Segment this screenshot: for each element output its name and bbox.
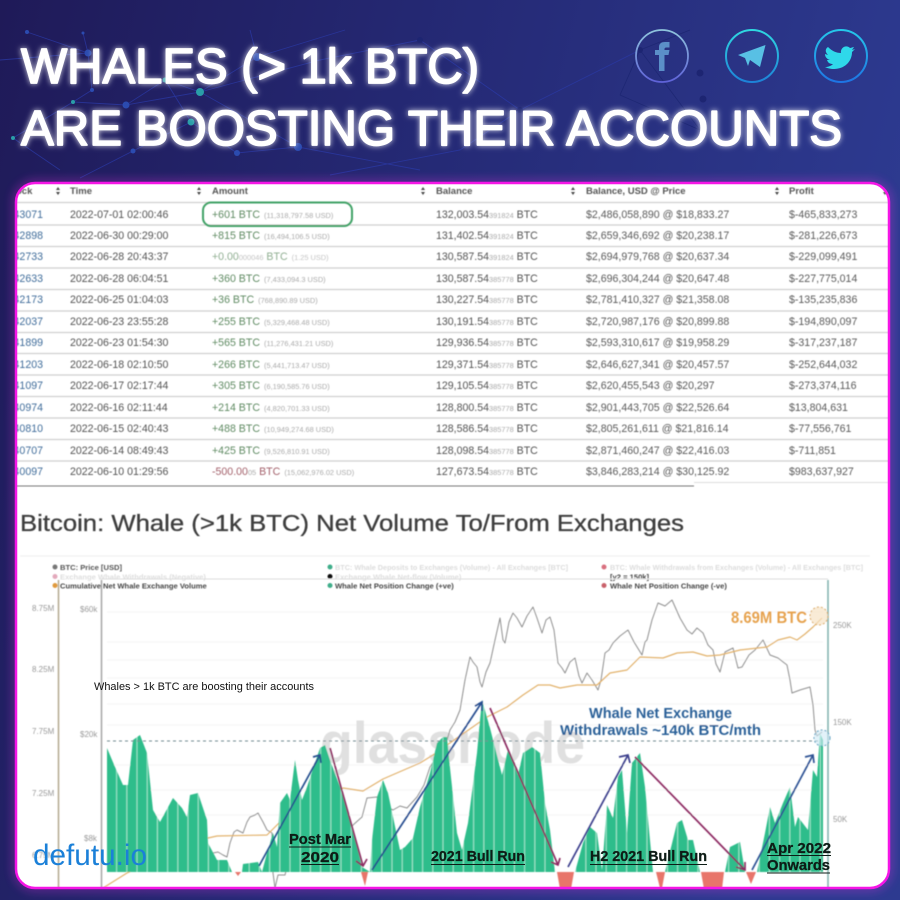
table rows: 42733	[14, 251, 43, 263]
table rows: $-465,833,273	[789, 209, 857, 221]
table rows: 41097	[14, 380, 43, 392]
legend: Cumulative Net Whale Exchange Volume	[60, 582, 207, 590]
caption: Whales > 1k BTC are boosting their accounts	[94, 681, 314, 693]
table rows: 127,673.54385778 BTC	[436, 466, 538, 478]
table rows: 130,191.54385778 BTC	[436, 316, 538, 328]
table rows: 2022-07-01 02:00:46	[70, 209, 168, 221]
table rows: 2022-06-23 01:54:30	[70, 337, 168, 349]
table rows: 40810	[14, 423, 43, 435]
line: cumulative net whale volume	[103, 618, 822, 888]
table rows: $3,846,283,214 @ $30,125.92	[586, 466, 729, 478]
area: positive net position	[107, 700, 823, 872]
table rows: $2,871,460,247 @ $22,416.03	[586, 445, 729, 457]
legend: BTC: Whale Withdrawals from Exchanges (Volume) - All Exchanges [BTC]	[610, 563, 863, 572]
panel: content card	[14, 183, 889, 889]
table header: Time	[70, 186, 92, 197]
annotation: apr 2022 onwards: Apr 2022	[767, 841, 831, 857]
marker: orange circle	[810, 607, 828, 625]
table rows: +815 BTC (16,494,106.5 USD)	[212, 230, 330, 242]
table rows: +36 BTC (768,890.89 USD)	[212, 294, 318, 306]
watermark: glassnode	[320, 711, 585, 776]
table header: Balance	[436, 186, 472, 197]
table rows: 2022-06-25 01:04:03	[70, 294, 168, 306]
title: WHALES (> 1k BTC)	[21, 39, 479, 94]
table rows: 129,936.54385778 BTC	[436, 337, 538, 349]
table rows: +601 BTC (11,318,797.58 USD)	[212, 209, 333, 221]
axis labels: 8.25M	[32, 665, 55, 674]
table rows: $2,486,058,890 @ $18,833.27	[586, 209, 729, 221]
annotation: post mar 2020: 2020	[301, 850, 339, 866]
chart heading: Bitcoin: Whale (>1k BTC) Net Volume To/From Exchanges	[20, 510, 684, 536]
table rows: 43071	[14, 209, 43, 221]
table rows: 2022-06-23 23:55:28	[70, 316, 168, 328]
table rows: 2022-06-28 20:43:37	[70, 251, 168, 263]
table rows: +488 BTC (10,949,274.68 USD)	[212, 423, 334, 435]
callout: whale net exchange	[560, 706, 761, 739]
table rows: 128,098.54385778 BTC	[436, 445, 538, 457]
table rows: $2,696,304,244 @ $20,647.48	[586, 273, 729, 285]
table rows: 128,586.54385778 BTC	[436, 423, 538, 435]
table rows: $-252,644,032	[789, 359, 857, 371]
line: BTC price	[213, 600, 822, 888]
table rows: 42898	[14, 230, 43, 242]
table rows: +0.00000046 BTC (1.25 USD)	[212, 251, 329, 263]
axis labels: 7.75M	[32, 727, 55, 736]
table rows: $2,720,987,176 @ $20,899.88	[586, 316, 729, 328]
axis labels: 50K	[833, 815, 848, 824]
table rows: 132,003.54391824 BTC	[436, 209, 538, 221]
table rows: 128,800.54385778 BTC	[436, 402, 538, 414]
legend: BTC: Price [USD]	[60, 563, 122, 572]
table rows: 2022-06-18 02:10:50	[70, 359, 168, 371]
axis labels: 6.75M	[32, 851, 55, 860]
callout: 8.69M BTC: 8.69M BTC	[731, 608, 807, 627]
table rows: 40707	[14, 445, 43, 457]
icon: telegram	[726, 30, 778, 82]
dashed reference line	[107, 740, 822, 742]
table rows: 2022-06-14 08:49:43	[70, 445, 168, 457]
title	[21, 39, 842, 156]
table rows: +565 BTC (11,276,431.21 USD)	[212, 337, 333, 349]
table rows: 2022-06-10 01:29:56	[70, 466, 168, 478]
axis labels: $8k	[84, 834, 98, 843]
table rows: 131,402.54391824 BTC	[436, 230, 538, 242]
table rows: 40097	[14, 466, 43, 478]
callout: whale net exchange: Whale Net Exchange	[589, 706, 732, 722]
annotation: post mar 2020: Post Mar	[289, 832, 351, 848]
table header: ock	[16, 186, 33, 197]
table rows: +360 BTC (7,433,094.3 USD)	[212, 273, 326, 285]
legend: Exchange Whale Withdrawals (Negative)	[60, 572, 206, 582]
axis labels: $60k	[80, 605, 98, 614]
table rows: $2,620,455,543 @ $20,297	[586, 380, 715, 392]
legend: Exchange Whale Net-flow (Volume)	[335, 572, 462, 582]
table header: Balance, USD @ Price	[586, 186, 686, 197]
table rows: 129,105.54385778 BTC	[436, 380, 538, 392]
table rows: +266 BTC (5,441,713.47 USD)	[212, 359, 330, 371]
table rows: $2,659,346,692 @ $20,238.17	[586, 230, 729, 242]
table rows: $2,781,410,327 @ $21,358.08	[586, 294, 729, 306]
annotation: apr 2022 onwards	[767, 841, 831, 874]
table rows: 130,227.54385778 BTC	[436, 294, 538, 306]
table rows: 42173	[14, 294, 43, 306]
logo: defutu.io: defutu.io	[33, 839, 147, 872]
table rows: +214 BTC (4,820,701.33 USD)	[212, 402, 330, 414]
legend	[52, 563, 863, 590]
table rows: $2,593,310,617 @ $19,958.29	[586, 337, 729, 349]
axis labels: 250K	[833, 621, 852, 630]
table rows: 2022-06-15 02:40:43	[70, 423, 168, 435]
table rows: 41899	[14, 337, 43, 349]
table rows: $-135,235,836	[789, 294, 857, 306]
legend: BTC: Whale Deposits to Exchanges (Volume) - All Exchanges [BTC]	[335, 563, 568, 572]
table rows: $2,901,443,705 @ $22,526.64	[586, 402, 729, 414]
table rows: 2022-06-28 06:04:51	[70, 273, 168, 285]
annotations: chart period labels	[289, 832, 831, 874]
table rows: $2,805,261,611 @ $21,816.14	[586, 423, 729, 435]
legend: [y2 = 150k]	[610, 572, 650, 582]
panel border	[16, 183, 889, 888]
annotation: 2021 bull run: 2021 Bull Run	[431, 849, 525, 865]
table rows: $2,646,627,341 @ $20,457.57	[586, 359, 729, 371]
axis labels	[32, 604, 852, 860]
table rows: 41203	[14, 359, 43, 371]
table rows: 2022-06-30 00:29:00	[70, 230, 168, 242]
icon: facebook	[636, 30, 688, 82]
panel glow	[16, 183, 889, 888]
table rows: 40974	[14, 402, 43, 414]
axes	[58, 580, 828, 888]
chart: whale net volume	[20, 556, 870, 889]
annotation: post mar 2020	[289, 832, 351, 866]
table rows: +255 BTC (5,329,468.48 USD)	[212, 316, 330, 328]
marker: blue circle	[814, 730, 830, 746]
table header	[19, 186, 886, 196]
table rows: -500.0005 BTC (15,062,976.02 USD)	[212, 466, 354, 478]
table rows: $13,804,631	[789, 402, 848, 414]
table rows: $-194,890,097	[789, 316, 857, 328]
table rows: $-77,556,761	[789, 423, 852, 435]
table rows: +305 BTC (6,190,585.76 USD)	[212, 380, 330, 392]
annotation: apr 2022 onwards: Onwards	[767, 858, 830, 874]
table header: Profit	[789, 186, 815, 197]
table rows	[14, 209, 857, 478]
table rows: 2022-06-17 02:17:44	[70, 380, 168, 392]
table rows: $-317,237,187	[789, 337, 857, 349]
table rows: 130,587.54385778 BTC	[436, 273, 538, 285]
icon: twitter	[815, 30, 867, 82]
table rows: $-281,226,673	[789, 230, 857, 242]
axis labels: 7.25M	[32, 789, 55, 798]
table rows: 42633	[14, 273, 43, 285]
table rows: 130,587.54391824 BTC	[436, 251, 538, 263]
table header: Amount	[212, 186, 249, 197]
axis labels: 8.75M	[32, 604, 55, 613]
table rows: $-711,851	[789, 445, 836, 457]
table rows: $983,637,927	[789, 466, 854, 478]
table rows: $2,694,979,768 @ $20,637.34	[586, 251, 729, 263]
legend: Whale Net Position Change (+ve)	[335, 582, 454, 590]
axis labels: 150K	[833, 718, 852, 727]
callout: whale net exchange: Withdrawals ~140k BTC/mth	[560, 723, 761, 739]
axis labels: $20k	[80, 730, 98, 739]
table rows: $-273,374,116	[789, 380, 857, 392]
highlight: latest inflow	[203, 202, 352, 226]
arrows: up and down cycles	[259, 702, 814, 870]
table rows: 129,371.54385778 BTC	[436, 359, 538, 371]
table: whale wallet transactions	[14, 186, 889, 486]
title: ARE BOOSTING THEIR ACCOUNTS	[21, 101, 842, 156]
annotation: h2 2021 bull run: H2 2021 Bull Run	[590, 849, 707, 865]
table rows: 42037	[14, 316, 43, 328]
legend: Whale Net Position Change (-ve)	[610, 582, 727, 590]
table rows: +425 BTC (9,526,810.91 USD)	[212, 445, 330, 457]
table rows: $-229,099,491	[789, 251, 857, 263]
table rows: $-227,775,014	[789, 273, 857, 285]
table rows: 2022-06-16 02:11:44	[70, 402, 168, 414]
area: negative net position	[235, 872, 756, 889]
